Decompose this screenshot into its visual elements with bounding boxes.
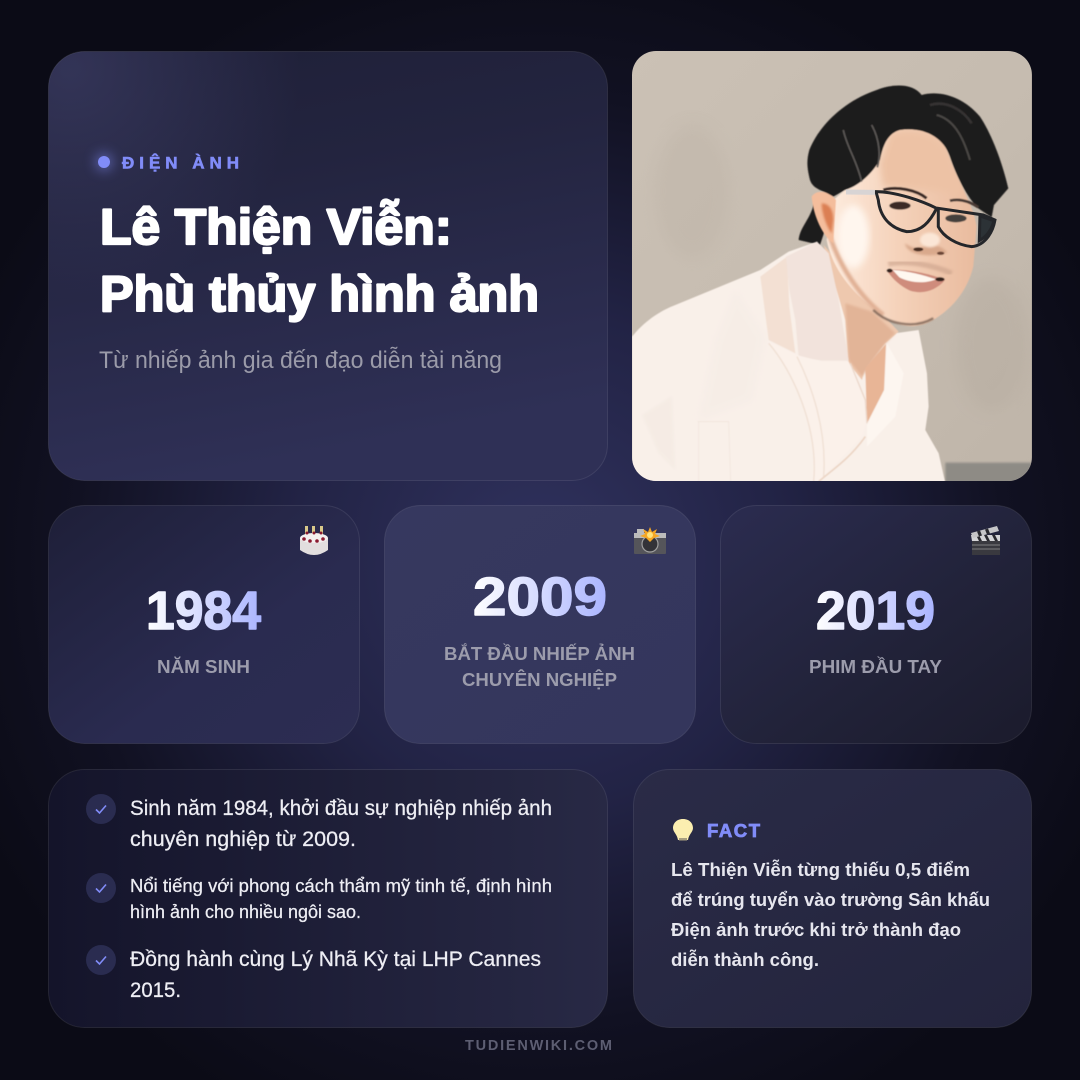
label: PHIM ĐẦU TAY (809, 656, 942, 677)
ear (812, 192, 836, 243)
portrait photo (632, 51, 1032, 483)
title (100, 199, 539, 322)
panel: bullet list (48, 770, 608, 1028)
bullet 2 (86, 873, 552, 922)
fact text: Điện ảnh trước khi trở thành đạo (671, 920, 961, 940)
panel: stat 1984 (48, 506, 360, 744)
eyebrows (883, 188, 927, 198)
mouth (887, 270, 945, 292)
hair (807, 85, 1008, 217)
title: Phù thủy hình ảnh (100, 266, 539, 322)
collar left (760, 257, 795, 353)
sleeve folds (699, 290, 765, 420)
label: BẮT ĐẦU NHIẾP ẢNH (444, 643, 635, 664)
icon: camera with flash (634, 527, 666, 554)
number: 1984 (146, 581, 261, 641)
bullet 3: 2015. (130, 979, 181, 1002)
back hair (798, 204, 824, 246)
fact heading: FACT (707, 820, 761, 841)
mustache (888, 263, 952, 273)
number: 2009 (473, 567, 607, 627)
subtitle: Từ nhiếp ảnh gia đến đạo diễn tài năng (99, 347, 502, 374)
panel: stat 2009 (384, 506, 696, 744)
panel: fact (634, 770, 1032, 1028)
fact text: Lê Thiện Viễn từng thiếu 0,5 điểm (671, 859, 970, 880)
bullet 2: hình ảnh cho nhiều ngôi sao. (130, 902, 361, 922)
nose (905, 243, 947, 255)
panel: hero (48, 52, 608, 480)
front panels (800, 356, 850, 364)
bullet 1: Sinh năm 1984, khởi đầu sự nghiệp nhiếp ảnh (130, 797, 552, 820)
footer source: TUDIENWIKI.COM (465, 1038, 612, 1054)
icon: clapper board (971, 526, 1000, 555)
fact text (671, 859, 990, 970)
bullet 3: Đồng hành cùng Lý Nhã Kỳ tại LHP Cannes (130, 948, 541, 971)
fact text: diễn thành công. (671, 949, 819, 970)
label: NĂM SINH (157, 656, 250, 677)
number: 2019 (816, 581, 935, 641)
fact text: để trúng tuyển vào trường Sân khấu (671, 890, 990, 910)
icon: birthday cake (300, 526, 328, 555)
panel: stat 2019 (720, 506, 1032, 744)
bullet 3 (86, 945, 541, 1002)
icon: light bulb (673, 819, 693, 840)
head (807, 85, 1008, 326)
eyes (889, 202, 911, 210)
label (444, 643, 635, 690)
title: Lê Thiện Viễn: (100, 199, 452, 255)
collar right (867, 343, 904, 447)
shirt and neck (632, 242, 945, 483)
beard (873, 310, 933, 324)
neck skin (824, 245, 899, 380)
bullet 2: Nổi tiếng với phong cách thẩm mỹ tinh tế, định hình (130, 876, 552, 896)
bullet 1: chuyên nghiệp từ 2009. (130, 828, 356, 851)
category tag: ĐIỆN ÀNH (122, 154, 239, 172)
label: CHUYÊN NGHIỆP (462, 669, 617, 690)
glasses (846, 192, 995, 247)
face (827, 128, 977, 326)
bullet 1 (86, 794, 552, 851)
